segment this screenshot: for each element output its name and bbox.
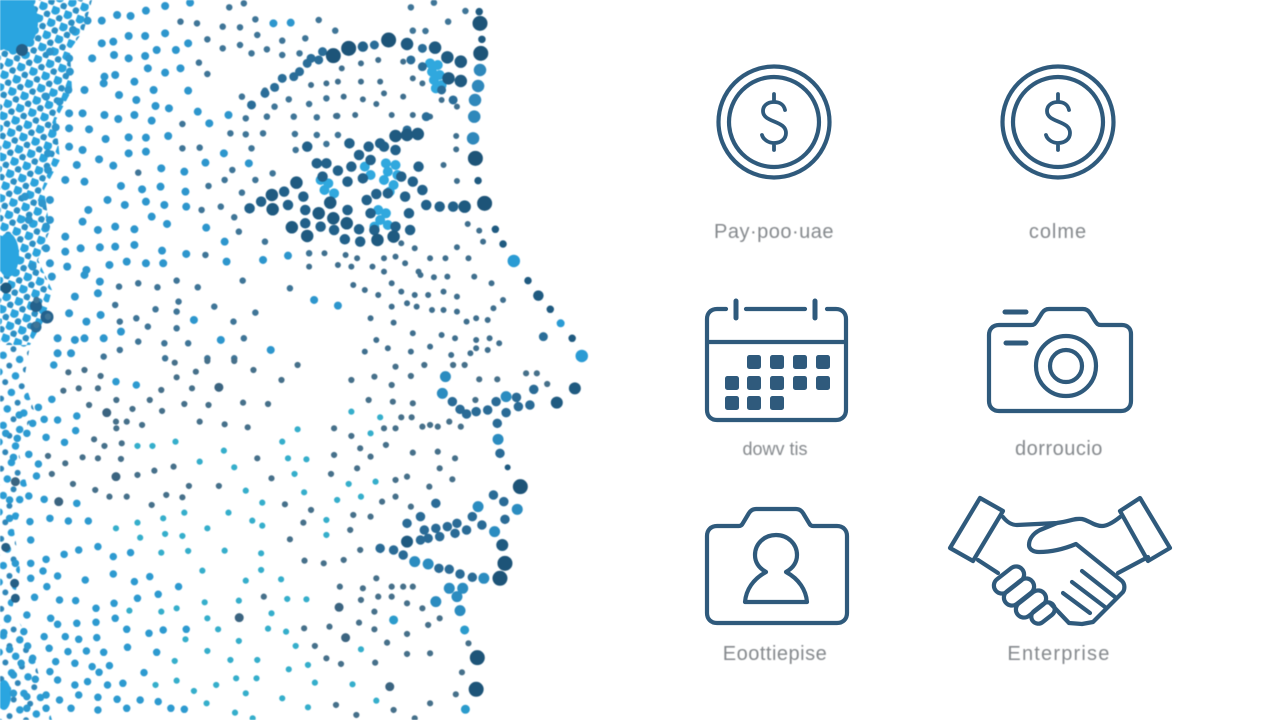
illustration: dotted face profile [0,0,589,720]
lower face dots [4,361,575,718]
label: Eoottiepise: Eoottiepise [723,643,827,665]
nose base and mouth dots [415,377,517,611]
brow line dots [252,45,543,337]
profile line blues [473,70,480,138]
blue field dots [25,3,338,353]
blue clusters: brow and eye highlights [321,63,442,227]
label: dorroucio: dorroucio [1015,438,1103,460]
darker grey dots [15,387,390,687]
grey field dots [48,361,547,718]
icon: ID photo frame [707,509,847,623]
icon: dollar coin left [718,66,830,178]
upper face dots [25,3,582,358]
teal field dots [116,412,380,718]
icon: handshake [950,498,1170,627]
icon: camera [989,309,1131,411]
label: colme: colme [1029,221,1087,243]
label: Pay poo uae: Pay·poo·uae [714,221,834,243]
nose and cheek dots [309,60,503,355]
dense dots along the left edge [0,0,93,720]
label: dowv tis: dowv tis [742,439,808,459]
icon: dollar coin right [1002,66,1114,178]
left edge darker dots [6,547,15,598]
slate field dots [36,3,465,358]
eye dots [250,47,453,242]
icon: calendar [707,301,846,420]
blue field dots [4,365,186,710]
label: Enterprise: Enterprise [1007,643,1111,665]
profile and eye large dots [272,44,465,240]
